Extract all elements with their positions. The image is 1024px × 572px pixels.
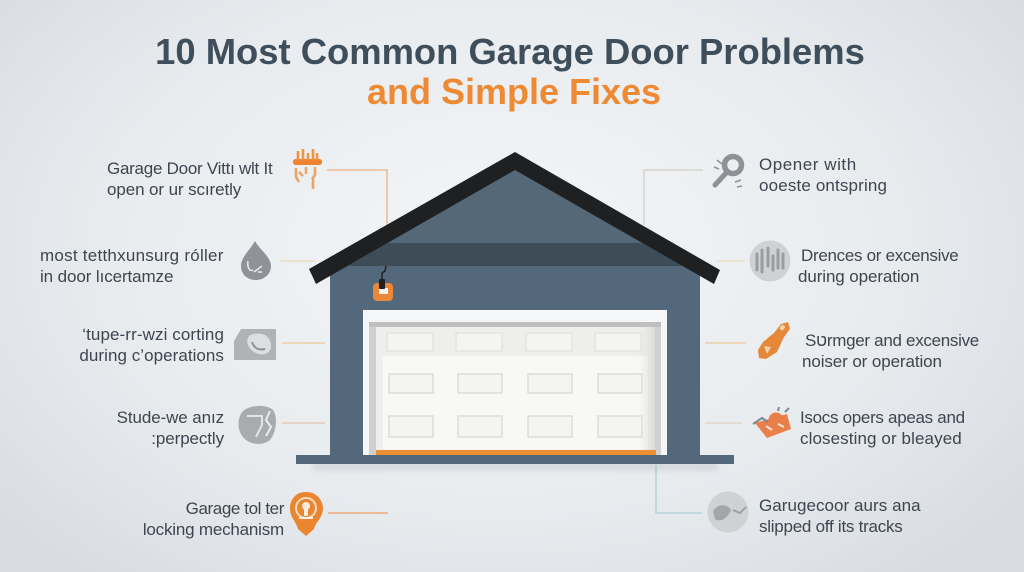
text: left item 2 — [40, 246, 224, 286]
text: left item 2: in door lıcertamze — [40, 267, 173, 286]
gable — [340, 165, 690, 266]
text: right item 3 — [802, 331, 979, 371]
title: 10 Most Common Garage Door Problems — [155, 31, 865, 72]
text: right item 3: Sטrmger and excensive — [805, 331, 979, 350]
roof — [309, 152, 720, 284]
text: left item 4: :perpectly — [151, 429, 224, 448]
text: left item 5: Garage tol ter — [186, 499, 284, 518]
text: left item 5: locking mechanism — [143, 520, 284, 539]
text: left item 5 — [143, 499, 284, 539]
text: right item 2: Drences or excensive — [801, 246, 958, 265]
opener light — [373, 266, 393, 301]
text: left item 1 — [107, 159, 273, 199]
text: right item 5: slipped off its tracks — [759, 517, 902, 536]
title — [155, 31, 865, 112]
icon: spring bracket — [293, 149, 322, 189]
title: and Simple Fixes — [367, 71, 661, 112]
text: right item 5 — [759, 496, 921, 536]
icon: noise bars — [750, 240, 790, 282]
dark band under gable — [348, 243, 683, 266]
text: left item 4 — [117, 408, 224, 448]
orange weather seal — [376, 450, 656, 455]
text: left item 4: Stude-we anız — [117, 408, 224, 427]
text: right item 4: closesting or bleayed — [800, 429, 962, 448]
icon: worn roller — [234, 329, 276, 360]
door panels — [387, 333, 642, 437]
text: left item 3: during c’operations — [79, 346, 224, 365]
icon: off-track — [708, 492, 748, 532]
icon: wrench — [758, 322, 790, 359]
leader lines — [279, 170, 746, 513]
icon: cable — [238, 406, 276, 444]
icon: tangled opener — [753, 407, 791, 438]
icon: magnifier — [714, 156, 742, 187]
text: left item 1: Garage Door Vittı wlt It — [107, 159, 272, 178]
floor slab — [296, 455, 734, 464]
door — [376, 327, 655, 450]
text: right item 2: during operation — [798, 267, 919, 286]
text: right item 4: Isocs opers apeas and — [800, 408, 965, 427]
text: left item 2: most tetthxunsurg róller — [40, 246, 224, 265]
door frame — [363, 310, 667, 455]
text: right item 3: noiser or operation — [802, 352, 942, 371]
text: right item 2 — [798, 246, 958, 286]
text: right item 4 — [800, 408, 965, 448]
icon: water drop — [241, 241, 271, 280]
text: right item 5: Garugecoor aurs ana — [759, 496, 921, 515]
wall — [330, 262, 700, 456]
text: left item 3: ‘tupe-rr-wzi corting — [82, 325, 224, 344]
text: left item 3 — [79, 325, 224, 365]
icon: light bulb pin — [290, 492, 323, 536]
text: right item 1 — [759, 155, 887, 195]
floor shadow — [312, 463, 718, 474]
text: left item 1: open or ur scıretly — [107, 180, 241, 199]
text: right item 1: ooeste ontspring — [759, 176, 887, 195]
door track — [369, 322, 661, 455]
text: right item 1: Opener with — [759, 155, 857, 174]
